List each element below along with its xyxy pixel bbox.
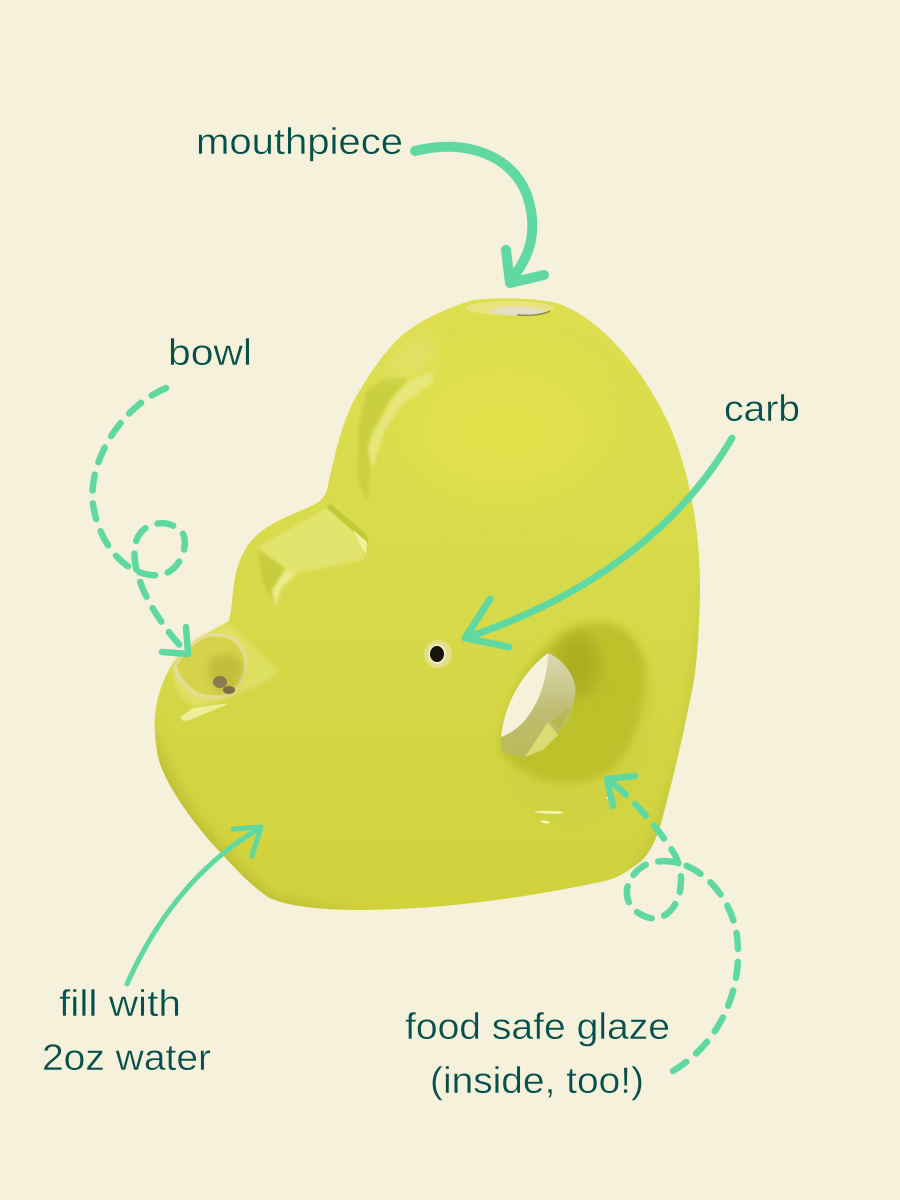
label: food safe glaze bbox=[405, 1006, 670, 1101]
label: food safe glaze: (inside, too!) bbox=[430, 1060, 644, 1101]
hole lip bbox=[498, 620, 655, 828]
label: fill with 2oz water: fill with bbox=[59, 983, 181, 1024]
infographic canvas bbox=[44, 127, 798, 1100]
carb hole bbox=[424, 640, 452, 668]
label: carb: carb bbox=[724, 388, 800, 429]
arrow: mouthpiece bbox=[415, 147, 544, 283]
label: fill with 2oz water bbox=[42, 983, 211, 1078]
body shading: right edge bbox=[628, 613, 700, 871]
bowl shine bbox=[180, 703, 230, 721]
step shine bbox=[353, 530, 367, 555]
body highlight: upper centre bbox=[445, 453, 560, 474]
arrow: carb bbox=[465, 438, 732, 647]
body shading: lower-left edge bbox=[154, 728, 345, 910]
shoulder shading bbox=[358, 378, 407, 498]
tube reflections bbox=[525, 722, 558, 757]
bowl inside bbox=[177, 637, 244, 695]
arrow: glaze bbox=[607, 776, 738, 1071]
through hole bbox=[501, 653, 548, 737]
arrow: bowl bbox=[92, 388, 188, 654]
ceramic heart-shaped pipe bbox=[140, 298, 720, 925]
step shadow band bbox=[327, 503, 369, 545]
label: bowl: bowl bbox=[168, 332, 252, 373]
mouthpiece opening bbox=[466, 301, 554, 316]
arrow: fill with water bbox=[127, 827, 261, 984]
hole interior bbox=[500, 623, 646, 783]
bowl bbox=[172, 622, 277, 721]
inner tube of hole bbox=[501, 653, 575, 757]
step top face bbox=[258, 508, 367, 573]
bowl top face bbox=[172, 622, 277, 707]
shoulder highlight bbox=[368, 372, 433, 470]
label: mouthpiece: mouthpiece bbox=[196, 121, 403, 162]
bowl rim bbox=[173, 633, 248, 699]
shoulder upper sheen bbox=[382, 332, 435, 382]
lip shine bbox=[535, 811, 562, 814]
label: fill with 2oz water: 2oz water bbox=[42, 1037, 211, 1078]
label: food safe glaze: food safe glaze bbox=[405, 1006, 670, 1047]
pipe body bbox=[155, 298, 700, 910]
step lower shade bbox=[258, 552, 286, 599]
